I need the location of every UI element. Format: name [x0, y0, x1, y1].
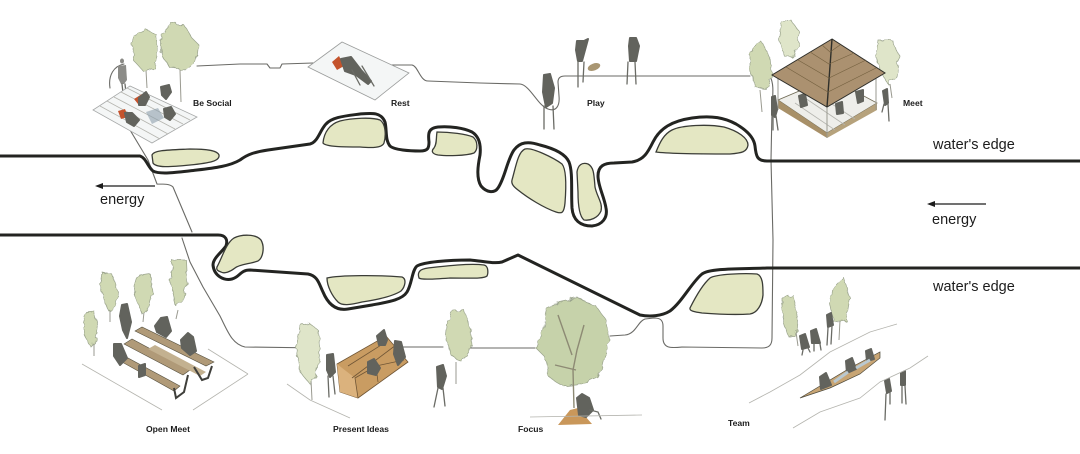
- icon: picnic table with benches: [122, 327, 214, 398]
- icon: seated people with red cushions: [118, 85, 175, 126]
- scene: Team: [749, 278, 928, 428]
- thin site boundary path: [110, 63, 773, 348]
- icon: player two: [576, 39, 588, 87]
- label: lower water's edge: water's edge: [932, 279, 1015, 295]
- icon: striped picnic mat: [93, 86, 197, 143]
- label: Meet: Meet: [903, 98, 923, 108]
- arrow: energy left: [95, 183, 155, 189]
- lower water's edge line and bank: [0, 235, 1080, 316]
- icon: open meet trees: [83, 260, 187, 356]
- icon: standing person: [118, 58, 127, 93]
- icon: ground outline: [82, 349, 248, 410]
- scene: Open Meet: [82, 260, 248, 410]
- icon: pavilion trees: [750, 19, 900, 112]
- icon: player three: [627, 38, 639, 84]
- icon: team trees: [782, 278, 850, 346]
- icon: seated reader: [577, 394, 601, 419]
- icon: player one: [543, 74, 554, 129]
- icon: flying disc: [587, 61, 601, 73]
- icon: river banks: [749, 324, 928, 428]
- arrow: energy right: [927, 201, 986, 207]
- icon: ground sketch: [287, 384, 350, 418]
- icon: standing person: [434, 365, 446, 407]
- icon: pavilion visitors: [772, 89, 889, 130]
- icon: trees behind the social mat: [132, 23, 198, 102]
- icon: tiered wooden seating: [337, 336, 408, 398]
- scene: Be Social: [93, 23, 198, 143]
- icon: left tree: [296, 322, 320, 400]
- label: Rest: Rest: [391, 98, 410, 108]
- scene: Meet pavilion: [750, 19, 900, 138]
- icon: rowing boat: [800, 349, 880, 398]
- label: upper water's edge: water's edge: [932, 137, 1015, 153]
- label: energy left: energy: [100, 192, 145, 208]
- scene: Present Ideas: [287, 310, 472, 418]
- label: energy right: energy: [932, 212, 977, 228]
- label: Play: Play: [587, 98, 605, 108]
- icon: ground sketch: [530, 415, 642, 417]
- islands: [152, 118, 763, 314]
- scene: Play: [543, 38, 639, 129]
- icon: large tree: [536, 298, 610, 408]
- icon: shingled roof: [772, 39, 885, 107]
- label: Be Social: Be Social: [193, 98, 232, 108]
- scene: Focus: [530, 298, 642, 425]
- icon: spectators on the bank: [800, 313, 906, 420]
- scene: Rest: [308, 42, 409, 100]
- label: Present Ideas: Present Ideas: [333, 424, 389, 434]
- upper water's edge line and bank: [0, 113, 1080, 226]
- icon: people at the table: [114, 304, 196, 377]
- icon: root mound: [558, 408, 592, 425]
- label: Focus: Focus: [518, 424, 544, 434]
- icon: presenters and audience: [327, 330, 405, 397]
- label: Team: Team: [728, 418, 750, 428]
- icon: deck: [778, 74, 877, 138]
- icon: reclining person: [332, 56, 374, 86]
- icon: right tree: [446, 310, 472, 384]
- icon: rest mat: [308, 42, 409, 100]
- label: Open Meet: Open Meet: [146, 424, 190, 434]
